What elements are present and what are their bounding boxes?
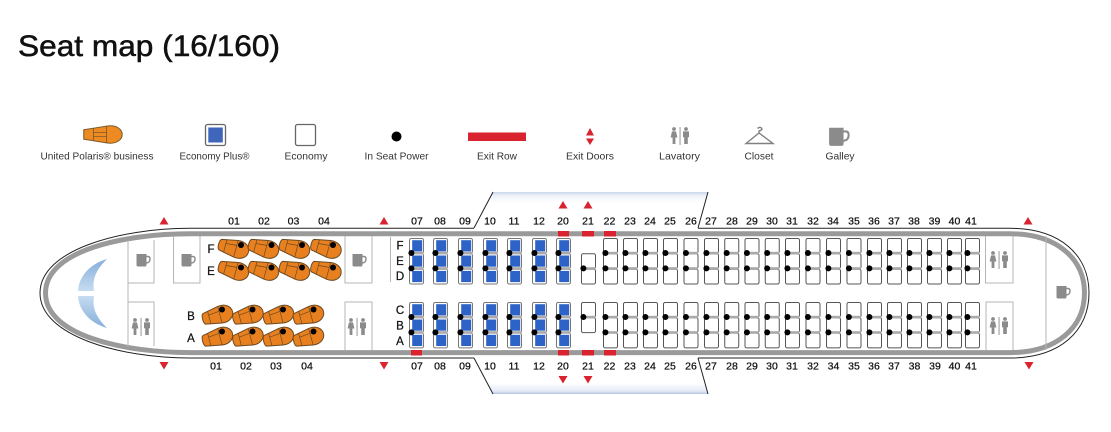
row numbers: bottom: 11 (509, 360, 520, 372)
row numbers: bottom: 21 (582, 360, 594, 372)
row numbers: bottom: 39 (929, 360, 941, 372)
row numbers: top: 36 (868, 216, 880, 228)
title: Seat map (16/160) (18, 30, 280, 63)
legend: In Seat Power (364, 132, 429, 162)
row numbers: top: 35 (848, 216, 860, 228)
legend: Exit Doors (566, 128, 614, 162)
seat letters: E (207, 266, 215, 278)
row numbers: bottom: 07 (411, 360, 423, 372)
row numbers: top: 08 (434, 216, 446, 228)
row numbers: bottom (210, 360, 977, 372)
legend: United Polaris business (40, 126, 154, 162)
seat letters: B (396, 320, 404, 332)
row numbers: bottom: 08 (434, 360, 446, 372)
row numbers: bottom: 34 (828, 360, 839, 372)
row numbers: top: 11 (509, 216, 520, 228)
row numbers: top: 03 (288, 216, 299, 228)
row numbers: top: 25 (664, 216, 676, 228)
row numbers: top: 21 (582, 216, 594, 228)
seat letters: B (187, 311, 195, 323)
row numbers: bottom: 28 (726, 360, 738, 372)
row numbers: bottom: 20 (557, 360, 569, 372)
row numbers: bottom: 22 (604, 360, 615, 372)
legend: Economy Plus: Economy Plus® (180, 150, 250, 162)
row numbers: top (228, 216, 977, 228)
row numbers: top: 38 (908, 216, 920, 228)
legend: Galley (826, 128, 855, 162)
seat letters: C (396, 305, 404, 317)
row numbers: top: 20 (557, 216, 569, 228)
fuselage outline (40, 228, 1089, 358)
row numbers: bottom: 02 (240, 360, 252, 372)
row numbers: bottom: 27 (705, 360, 717, 372)
legend: Economy Plus (180, 124, 250, 162)
row numbers: bottom: 31 (786, 360, 798, 372)
row numbers: bottom: 09 (459, 360, 471, 372)
row numbers: bottom: 03 (270, 360, 282, 372)
legend: Exit Row (468, 132, 526, 162)
seat letters: F (396, 240, 404, 252)
legend: Lavatory (659, 127, 701, 162)
row numbers: top: 24 (644, 216, 656, 228)
row numbers: bottom: 25 (664, 360, 676, 372)
row numbers: top: 26 (685, 216, 697, 228)
economy seats: row 21 (580, 254, 596, 333)
row numbers: bottom: 40 (949, 360, 960, 372)
seat letters: A (396, 336, 404, 348)
row numbers: top: 07 (411, 216, 423, 228)
seat letters: E (396, 256, 404, 268)
row numbers: top: 40 (949, 216, 960, 228)
row numbers: top: 04 (318, 216, 330, 228)
row numbers: bottom: 04 (301, 360, 313, 372)
cockpit windshield (78, 259, 107, 328)
row numbers: top: 29 (746, 216, 758, 228)
row numbers: top: 30 (766, 216, 778, 228)
legend (40, 124, 855, 162)
row numbers: top: 01 (228, 216, 240, 228)
row numbers: bottom: 38 (909, 360, 920, 372)
row numbers: top: 31 (786, 216, 798, 228)
row numbers: bottom: 26 (685, 360, 697, 372)
row numbers: bottom: 01 (210, 360, 222, 372)
row numbers: top: 09 (459, 216, 471, 228)
legend: Closet (744, 127, 774, 162)
legend: Galley: Galley (826, 150, 855, 162)
wing: bottom (474, 358, 708, 394)
legend: Exit Doors: Exit Doors (566, 150, 614, 162)
row numbers: bottom: 30 (766, 360, 778, 372)
legend: Closet: Closet (744, 150, 774, 162)
row numbers: top: 28 (726, 216, 738, 228)
seat letters (187, 240, 404, 348)
legend: Economy: Economy (284, 150, 328, 162)
legend: Lavatory: Lavatory (659, 150, 701, 162)
row numbers: top: 22 (604, 216, 615, 228)
row numbers: bottom: 24 (644, 360, 656, 372)
polaris business seats (200, 236, 343, 350)
cabin partitions (128, 236, 1046, 350)
row numbers: bottom: 23 (624, 360, 636, 372)
row numbers: top: 27 (705, 216, 717, 228)
legend: United Polaris business: United Polaris® business (40, 150, 154, 162)
seat letters: D (396, 271, 404, 283)
economy seats (602, 238, 980, 348)
legend: Exit Row: Exit Row (477, 150, 517, 162)
row numbers: bottom: 37 (888, 360, 900, 372)
row numbers: top: 10 (484, 216, 496, 228)
row numbers: bottom: 41 (965, 360, 977, 372)
lavatory icons (132, 251, 1008, 336)
row numbers: bottom: 12 (533, 360, 545, 372)
seat letters: A (187, 333, 195, 345)
row numbers: bottom: 10 (484, 360, 496, 372)
row numbers: top: 34 (827, 216, 839, 228)
row numbers: top: 41 (965, 216, 977, 228)
economy plus seats (408, 238, 570, 348)
row numbers: bottom: 36 (868, 360, 880, 372)
legend: In Seat Power: In Seat Power (364, 150, 429, 162)
exit door arrows (160, 201, 1034, 384)
row numbers: top: 23 (624, 216, 636, 228)
galley icons (136, 254, 1070, 298)
row numbers: bottom: 32 (807, 360, 819, 372)
row numbers: top: 39 (929, 216, 940, 228)
row numbers: top: 32 (807, 216, 819, 228)
legend: Economy (284, 124, 328, 162)
row numbers: top: 02 (258, 216, 270, 228)
row numbers: bottom: 29 (746, 360, 758, 372)
exit row markers (411, 231, 616, 356)
row numbers: top: 12 (533, 216, 545, 228)
wing: top (474, 192, 708, 228)
seat letters: F (207, 244, 215, 256)
row numbers: bottom: 35 (848, 360, 860, 372)
row numbers: top: 37 (888, 216, 900, 228)
